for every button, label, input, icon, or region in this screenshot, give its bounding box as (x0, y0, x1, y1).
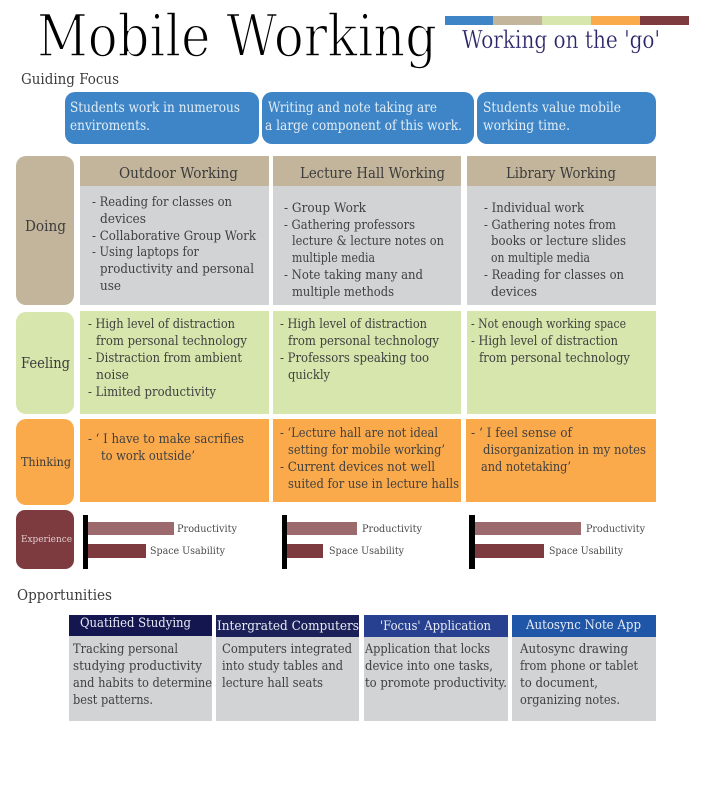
focus box 2: a large component of this work. (265, 118, 462, 134)
doing column: outdoor working (80, 156, 269, 305)
opportunity card 1: Tracking personal (73, 642, 178, 657)
opportunity card 1: Quatified Studying (80, 616, 191, 631)
bar chart 2: Productivity (362, 524, 422, 535)
opportunity card 4: from phone or tablet (520, 659, 639, 674)
row label: doing (16, 156, 74, 305)
opportunity card 3 (364, 615, 508, 721)
opportunity card 4: Autosync drawing (519, 642, 628, 657)
opportunity card 1 (69, 615, 212, 721)
opportunity card 2 (216, 615, 359, 721)
thinking cell 2: - ‘Lecture hall are not ideal (280, 426, 438, 441)
row label: thinking: Thinking (21, 454, 71, 469)
feeling cell 3: from personal technology (479, 351, 630, 366)
opportunity card 2: into study tables and (222, 659, 343, 674)
heading: opportunities: Opportunities (17, 586, 112, 604)
focus box 3 (477, 92, 656, 144)
doing column: library working: devices (491, 285, 537, 300)
feeling cell 1: from personal technology (96, 334, 247, 349)
doing column: lecture hall working: - Group Work (284, 201, 367, 216)
doing column: lecture hall working: Lecture Hall Working (300, 164, 445, 182)
doing column: library working: - Reading for classes on (484, 268, 624, 283)
feeling cell 1: - High level of distraction (88, 317, 235, 332)
thinking cell 1 (80, 419, 269, 502)
doing column: lecture hall working: lecture & lecture notes on (292, 234, 444, 249)
doing column: lecture hall working (273, 156, 461, 305)
doing column: outdoor working: Outdoor Working (119, 164, 238, 182)
bar chart 3 (469, 515, 645, 569)
doing column: lecture hall working: multiple methods (292, 285, 394, 300)
doing column: library working: - Individual work (484, 201, 585, 216)
doing column: lecture hall working: - Gathering professors (284, 218, 415, 233)
row label: thinking (16, 419, 74, 505)
feeling cell 1 (80, 311, 269, 414)
focus box 3: Students value mobile (483, 100, 621, 116)
bar chart 2 (282, 515, 422, 569)
focus box 1 (65, 92, 259, 144)
opportunity card 3: 'Focus' Application (380, 619, 492, 634)
thinking cell 3: - ‘ I feel sense of (471, 426, 573, 441)
feeling cell 3: - Not enough working space (471, 317, 626, 332)
bar chart 3: Productivity (586, 524, 645, 535)
opportunity card 3: Application that locks (364, 642, 490, 657)
opportunity card 2: Intergrated Computers (217, 619, 359, 634)
doing column: outdoor working: - Reading for classes on (92, 195, 232, 210)
opportunity card 4: organizing notes. (520, 693, 620, 708)
bar chart 1: Space Usability (150, 546, 225, 557)
doing column: outdoor working: devices (100, 212, 146, 227)
doing column: library working: on multiple media (491, 251, 590, 266)
opportunity card 1: best patterns. (73, 693, 153, 708)
opportunity card 3: device into one tasks, (365, 659, 493, 674)
thinking cell 1: to work outside’ (101, 449, 195, 464)
thinking cell 2: suited for use in lecture halls (288, 477, 459, 492)
doing column: outdoor working: - Collaborative Group Work (92, 229, 257, 244)
subtitle: Working on the 'go' (462, 26, 660, 54)
focus box 2: Writing and note taking are (268, 100, 437, 116)
thinking cell 2: - Current devices not well (280, 460, 435, 475)
opportunity card 2: lecture hall seats (222, 676, 323, 691)
doing column: library working: books or lecture slides (491, 234, 626, 249)
doing column: outdoor working: use (100, 279, 121, 294)
focus box 3: working time. (483, 118, 570, 134)
feeling cell 1: - Limited productivity (88, 385, 216, 400)
bar chart 1: Productivity (177, 524, 237, 535)
feeling cell 1: - Distraction from ambient (88, 351, 243, 366)
doing column: outdoor working: - Using laptops for (92, 245, 200, 260)
thinking cell 3 (466, 419, 656, 502)
row label: doing: Doing (25, 217, 66, 235)
thinking cell 1: - ‘ I have to make sacrifies (88, 432, 244, 447)
feeling cell 1: noise (96, 368, 129, 383)
colour strip (445, 16, 689, 25)
doing column: lecture hall working: multiple media (292, 251, 375, 266)
opportunity card 2: Computers integrated (222, 642, 352, 657)
feeling cell 2: quickly (288, 368, 330, 383)
row label: experience (16, 510, 74, 569)
doing column: outdoor working: productivity and personal (100, 262, 254, 277)
thinking cell 3: disorganization in my notes (483, 443, 646, 458)
doing column: library working: - Gathering notes from (484, 218, 616, 233)
feeling cell 2 (273, 311, 461, 414)
opportunity card 4 (512, 615, 656, 721)
thinking cell 2 (273, 419, 461, 502)
bar chart 1 (83, 515, 237, 569)
opportunity card 3: to promote productivity. (365, 676, 507, 691)
thinking cell 2: setting for mobile working’ (288, 443, 445, 458)
heading: guiding focus: Guiding Focus (21, 70, 119, 88)
bar chart 2: Space Usability (329, 546, 404, 557)
focus box 2 (262, 92, 474, 144)
feeling cell 3 (467, 311, 656, 414)
opportunity card 1: studying productivity (73, 659, 202, 674)
title: Mobile Working (37, 2, 437, 70)
doing column: library working: Library Working (506, 164, 616, 182)
opportunity card 4: to document, (520, 676, 598, 691)
feeling cell 3: - High level of distraction (471, 334, 618, 349)
row label: feeling: Feeling (21, 354, 70, 372)
feeling cell 2: - High level of distraction (280, 317, 427, 332)
opportunity card 4: Autosync Note App (525, 618, 641, 633)
focus box 1: enviroments. (70, 118, 150, 134)
row label: experience: Experience (21, 534, 72, 545)
doing column: lecture hall working: - Note taking many and (284, 268, 423, 283)
thinking cell 3: and notetaking’ (481, 460, 571, 475)
row label: feeling (16, 312, 74, 414)
focus box 1: Students work in numerous (70, 100, 240, 116)
panel: guiding focus boxes (65, 92, 656, 144)
doing column: library working (467, 156, 656, 305)
feeling cell 2: from personal technology (288, 334, 439, 349)
feeling cell 2: - Professors speaking too (280, 351, 429, 366)
bar chart 3: Space Usability (549, 546, 623, 557)
opportunity card 1: and habits to determine (73, 676, 212, 691)
